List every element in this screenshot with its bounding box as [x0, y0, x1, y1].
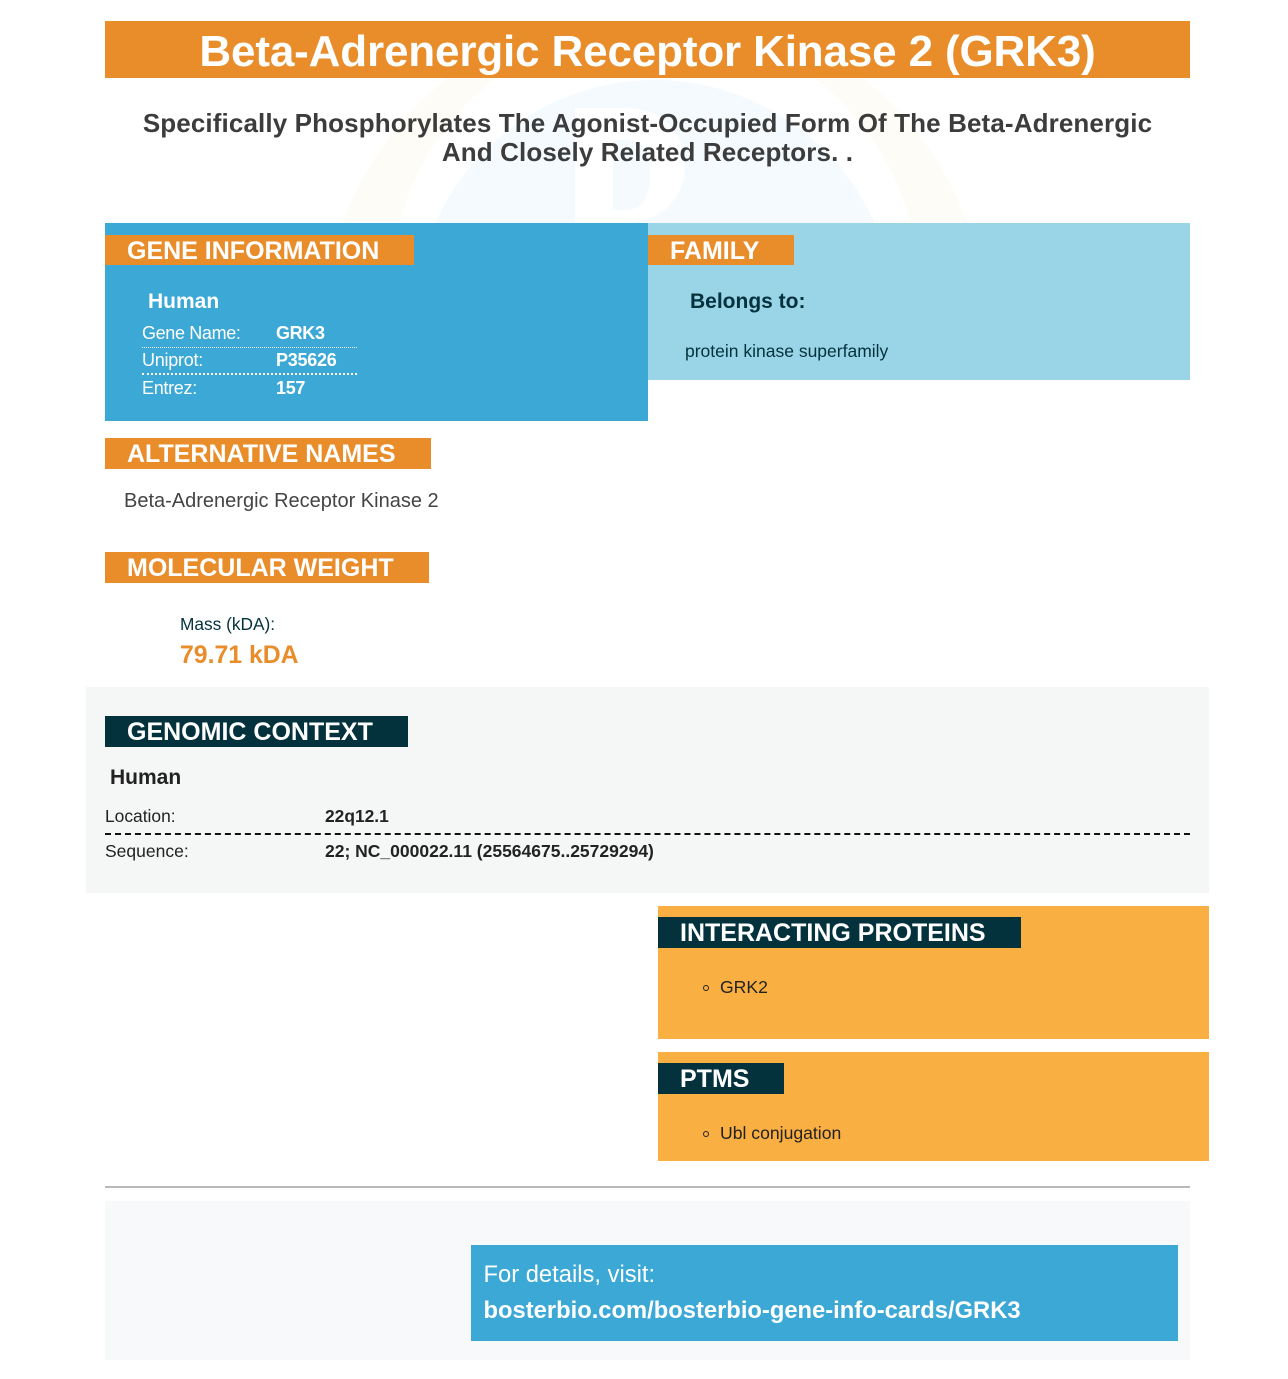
- row: uniprot: P35626: [276, 350, 337, 370]
- callout label: For details, visit:: [484, 1261, 655, 1288]
- row: gene name: [142, 320, 357, 348]
- subtitle: Specifically Phosphorylates The Agonist-Occupied Form Of The Beta-Adrenergic: [143, 108, 1152, 138]
- title banner: Beta-Adrenergic Receptor Kinase 2 (GRK3): [199, 27, 1096, 76]
- row: sequence: Sequence:: [105, 841, 189, 861]
- mass label: Mass (kDA):: [180, 614, 275, 634]
- row: gene name: GRK3: [276, 323, 325, 343]
- heading: ptms: PTMS: [680, 1065, 749, 1093]
- subtitle: And Closely Related Receptors. .: [442, 137, 853, 167]
- row: entrez: [142, 378, 305, 398]
- row: gene name: Gene Name:: [142, 323, 241, 343]
- heading: interacting proteins: INTERACTING PROTEINS: [680, 919, 986, 947]
- mass value: 79.71 kDA: [180, 642, 299, 669]
- panel: family: [648, 223, 1190, 380]
- row: uniprot: [142, 348, 357, 375]
- details callout: [471, 1245, 1178, 1341]
- species label: Human: [148, 290, 219, 313]
- row: location: [105, 803, 1190, 835]
- watermark logo: [343, 78, 967, 223]
- heading: alternative names: ALTERNATIVE NAMES: [127, 440, 396, 468]
- row: location: Location:: [105, 806, 176, 826]
- heading: molecular weight: MOLECULAR WEIGHT: [127, 554, 394, 582]
- row: sequence: [105, 841, 654, 861]
- subtitle: [143, 108, 1152, 167]
- heading: gene information: GENE INFORMATION: [127, 237, 379, 265]
- panel: interacting proteins: [658, 906, 1209, 1039]
- panel: gene information: [105, 223, 648, 421]
- footer panel: [105, 1201, 1190, 1360]
- row: location: 22q12.1: [325, 806, 389, 826]
- alternative names text: Beta-Adrenergic Receptor Kinase 2: [124, 490, 439, 512]
- list item: GRK2: [720, 977, 768, 997]
- row: entrez: Entrez:: [142, 378, 197, 398]
- heading: ptms: [658, 1063, 784, 1094]
- panel: ptms: [658, 1052, 1209, 1161]
- species label: Human: [110, 766, 181, 789]
- heading: family: FAMILY: [670, 237, 759, 265]
- belongs to label: Belongs to:: [690, 290, 806, 313]
- row: uniprot: Uniprot:: [142, 350, 203, 370]
- callout url: bosterbio.com/bosterbio-gene-info-cards/GRK3: [484, 1297, 1021, 1324]
- panel: genomic context: [86, 687, 1209, 893]
- row: sequence: 22; NC_000022.11 (25564675..25729294): [325, 841, 654, 861]
- heading: family: [648, 235, 794, 265]
- row: entrez: 157: [276, 378, 305, 398]
- list item: Ubl conjugation: [720, 1123, 841, 1143]
- heading: genomic context: GENOMIC CONTEXT: [127, 718, 373, 746]
- family value: protein kinase superfamily: [685, 341, 888, 361]
